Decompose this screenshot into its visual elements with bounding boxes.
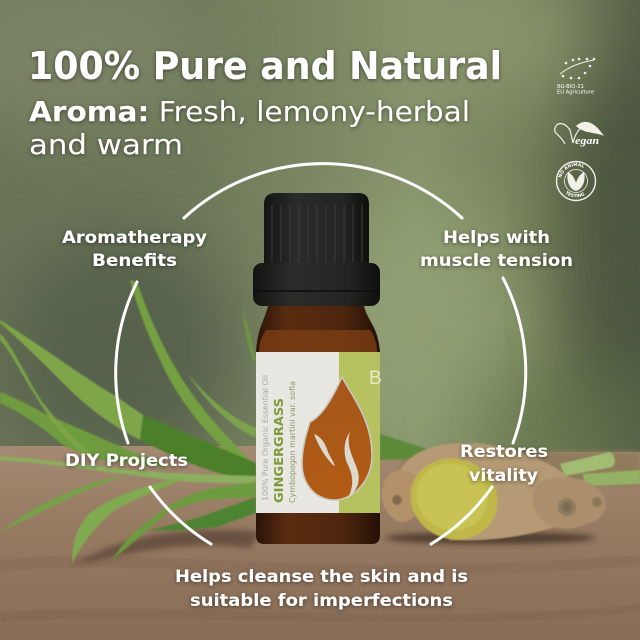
label text: GINGERGRASS: [271, 398, 286, 503]
ginger root: [382, 443, 606, 553]
circular arc diagram: [116, 164, 526, 544]
icon: EU organic leaf: [557, 58, 595, 96]
label: restores vitality: [460, 442, 548, 485]
label: muscle tension: muscle tension: [420, 251, 573, 270]
label text: [260, 375, 297, 503]
product bottle: [253, 193, 382, 544]
aroma description: and warm: [29, 128, 183, 161]
blurred green background: [0, 0, 640, 470]
collar seam: [254, 290, 379, 292]
icon: EU organic leaf: EU Agriculture: [557, 90, 594, 96]
icon: EU organic leaf: BG-BIO-21: [557, 84, 584, 90]
icon: no animal testing: TESTING: [566, 190, 584, 198]
label: aromatherapy benefits: Aromatherapy: [62, 228, 207, 247]
label: cleanse the skin: suitable for imperfections: [190, 591, 453, 610]
drop emblem: [302, 377, 372, 500]
dropper cap: [264, 193, 369, 264]
icon: no animal testing: NO ANIMAL: [558, 162, 584, 178]
label: muscle tension: [420, 228, 573, 270]
icon: no animal testing: [556, 160, 596, 202]
label: cleanse the skin: [175, 567, 468, 610]
lemongrass leaves: [0, 280, 640, 563]
label: aromatherapy benefits: [62, 228, 207, 270]
title: 100% Pure and Natural: [28, 44, 502, 88]
cap ribs: [272, 205, 362, 262]
label: muscle tension: Helps with: [443, 228, 550, 247]
bottle glass: [256, 306, 380, 544]
label: DIY projects: DIY Projects: [65, 451, 188, 470]
label: restores vitality: Restores: [460, 442, 548, 461]
aroma description: [29, 95, 470, 161]
wooden table: [0, 446, 640, 640]
cap collar: [253, 263, 380, 306]
bottle label green part: [339, 352, 380, 513]
label: aromatherapy benefits: Benefits: [92, 251, 177, 270]
amber liquid glow: [259, 330, 377, 352]
label brand letter: B: [369, 368, 382, 389]
label: cleanse the skin: Helps cleanse the skin and is: [175, 567, 468, 586]
label text: Cymbopogon martini var. sofia: [288, 381, 297, 503]
aroma description: Aroma: Fresh, lemony-herbal: [29, 95, 470, 128]
label text: 100% Pure Organic Essential Oil: [260, 375, 270, 501]
icon: vegan: egan: [575, 136, 599, 147]
bottle label white part: [256, 352, 340, 513]
icon: vegan: [555, 122, 604, 147]
label: restores vitality: vitality: [469, 466, 538, 485]
